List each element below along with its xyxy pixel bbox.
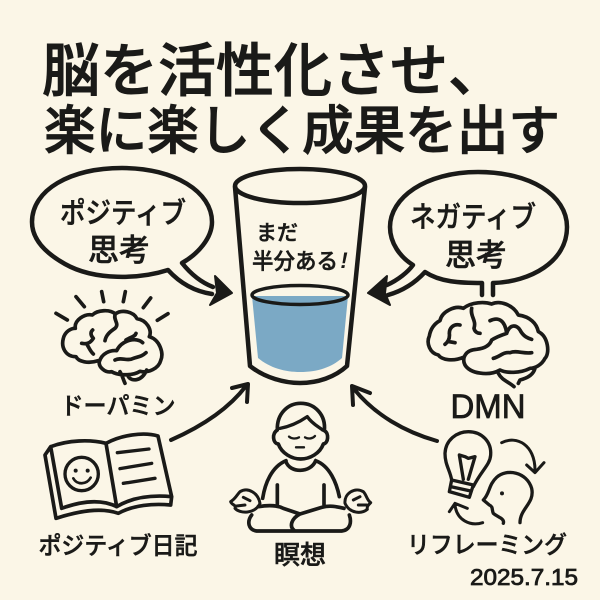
label: negative thinking: ネガティブ: [410, 201, 536, 234]
label: positive diary: ポジティブ日記: [38, 532, 198, 560]
icon: reframing bulb and head: [445, 432, 544, 524]
date stamp: 2025.7.15: [470, 564, 578, 590]
label: negative thinking: 思考: [445, 238, 507, 273]
label: reframing: リフレーミング: [407, 532, 567, 559]
label: dopamine: ドーパミン: [60, 393, 176, 420]
title: 楽に楽しく成果を出す: [44, 102, 560, 161]
glass caption: まだ: [256, 222, 298, 245]
glass of water: [235, 169, 365, 383]
label: positive thinking: 思考: [88, 233, 150, 268]
label: positive thinking: [60, 197, 186, 268]
arrow: diary to glass: [171, 384, 248, 440]
title: 脳を活性化させ、: [42, 39, 506, 104]
icon: brain DMN: [428, 303, 548, 387]
glass caption: [252, 222, 348, 274]
glass outline: [235, 169, 365, 203]
arrow: negative to glass: [368, 276, 390, 305]
icon: positive diary book: [45, 434, 172, 518]
label: meditation: 瞑想: [274, 540, 326, 570]
label: positive thinking: ポジティブ: [60, 197, 186, 230]
glass caption: 半分ある: [252, 249, 338, 274]
label: negative thinking: [410, 201, 536, 273]
title: [42, 39, 560, 161]
arrow: positive to glass: [210, 276, 232, 305]
water: [252, 296, 348, 372]
icon: brain with dopamine rays: [56, 292, 168, 383]
label: DMN: DMN: [450, 388, 526, 426]
speech bubble: negative thinking: [368, 172, 567, 305]
icon: meditating person: [231, 403, 371, 531]
arrow: reframing to glass: [352, 386, 437, 441]
speech bubble: positive thinking: [32, 168, 232, 305]
glass caption: !: [340, 248, 348, 273]
